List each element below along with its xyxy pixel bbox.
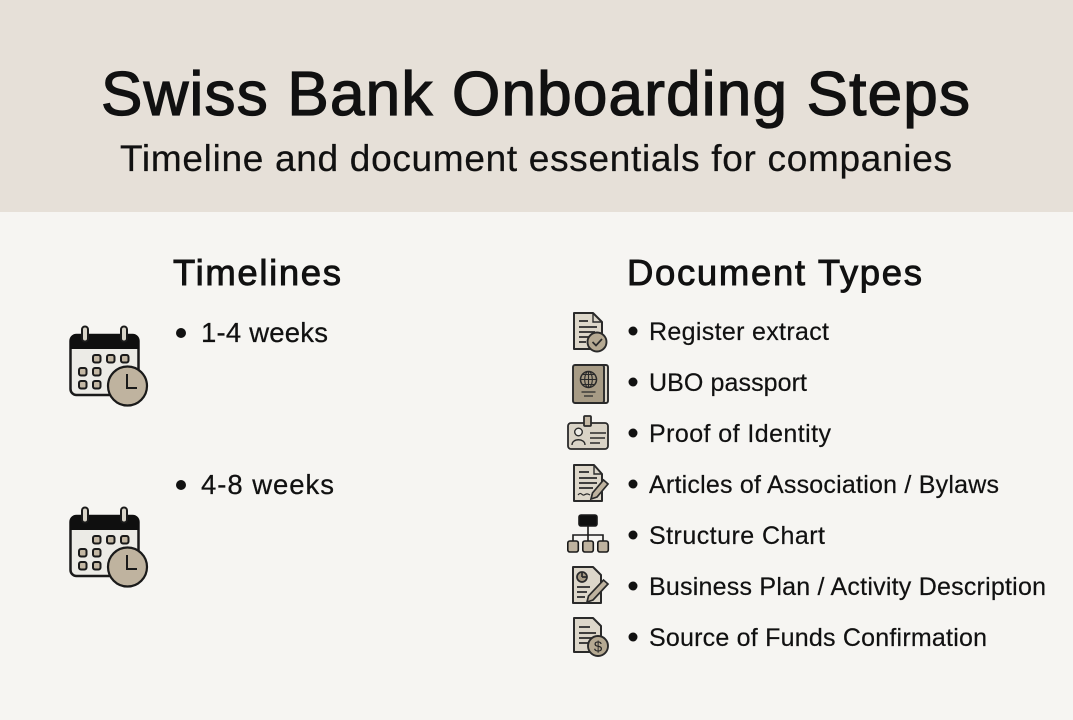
heading: document types: Document Types <box>627 252 922 293</box>
list item: register extract: Register extract <box>649 318 829 346</box>
title: Swiss Bank Onboarding Steps <box>101 60 970 129</box>
list item: structure chart: Structure Chart <box>649 522 825 550</box>
icon: source of funds <box>574 618 608 656</box>
icon: ID badge <box>568 416 608 449</box>
icon: calendar with clock 2 <box>70 508 147 586</box>
icon: structure chart <box>568 515 608 552</box>
icon: signed articles <box>574 465 608 501</box>
panel: timelines <box>70 252 341 586</box>
icon: calendar with clock 1 <box>70 326 147 406</box>
icon: register extract <box>574 313 606 352</box>
list item: proof of identity: Proof of Identity <box>649 420 832 448</box>
subtitle: Timeline and document essentials for companies <box>120 138 952 179</box>
list item: business plan: Business Plan / Activity Description <box>649 573 1046 601</box>
icon: passport <box>573 365 608 403</box>
list item: articles: Articles of Association / Bylaws <box>649 471 999 499</box>
timeline item: 1-4 weeks: 1-4 weeks <box>201 317 328 348</box>
heading: timelines: Timelines <box>173 252 341 293</box>
icon: source of funds: $ <box>594 638 603 656</box>
list item: source of funds: Source of Funds Confirmation <box>649 624 987 652</box>
header band <box>0 0 1073 212</box>
panel: document types <box>568 252 1046 656</box>
list item: UBO passport: UBO passport <box>649 369 807 397</box>
timeline item: 4-8 weeks: 4-8 weeks <box>201 469 334 500</box>
icon: business plan <box>573 567 608 603</box>
